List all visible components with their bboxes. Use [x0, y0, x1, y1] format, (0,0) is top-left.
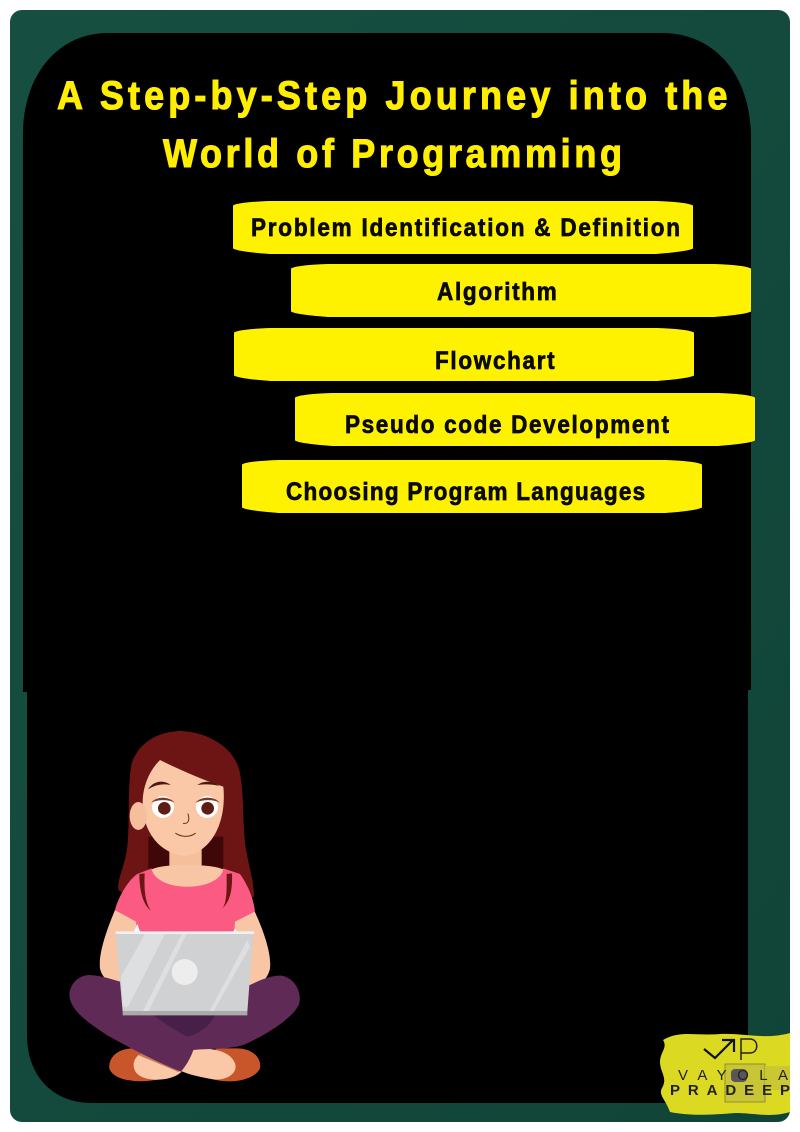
nose and mouth: [176, 814, 195, 836]
legs: [69, 975, 300, 1072]
step 1: Problem Identification & Definition: [234, 202, 692, 253]
logo badge: [660, 1033, 790, 1115]
laptop lid: [116, 933, 253, 1012]
ear: [130, 802, 147, 830]
step 1: Problem Identification & Definition: Problem Identification & Definition: [251, 214, 680, 242]
ankle: [138, 1052, 182, 1072]
title: World of Programming: [163, 132, 622, 176]
laptop logo: [172, 959, 198, 985]
step 4: Pseudo code Development: [296, 394, 754, 445]
illustration: girl with laptop: [69, 731, 300, 1081]
badge dotted strip: [765, 1066, 790, 1090]
badge text: VAYOLA: [678, 1067, 788, 1084]
step 2: Algorithm: [292, 265, 750, 316]
badge icon chip: [731, 1069, 747, 1082]
step 5: Choosing Program Languages: Choosing Program Languages: [286, 478, 645, 506]
title: [57, 74, 727, 176]
badge shape: [660, 1033, 790, 1115]
step 4: Pseudo code Development: Pseudo code Development: [345, 411, 669, 439]
title: A Step-by-Step Journey into the: [57, 74, 727, 118]
step 3: Flowchart: [235, 329, 693, 380]
laptop base: [123, 1011, 247, 1015]
badge text: PRADEEP: [670, 1082, 790, 1099]
neck: [169, 847, 202, 867]
step 5: Choosing Program Languages: [243, 461, 701, 512]
hair shadow behind neck: [148, 837, 223, 870]
step 2: Algorithm: Algorithm: [437, 278, 557, 306]
face: [143, 760, 224, 856]
inner leg shadow: [153, 1015, 215, 1037]
hair strands on shirt: [139, 873, 232, 911]
shirt: [115, 868, 255, 937]
shirt lower strip: [168, 1013, 200, 1019]
badge letter mark: [741, 1039, 757, 1060]
badge dotted square: [725, 1064, 765, 1102]
white sleeve tabs: [134, 924, 237, 932]
laptop top edge: [116, 931, 254, 934]
hair: [118, 731, 254, 910]
badge text: [670, 1067, 790, 1099]
laptop glare: [121, 934, 250, 1012]
badge check arrow mark: [704, 1040, 734, 1058]
eyebrows: [148, 782, 219, 789]
neckline skin: [152, 865, 223, 887]
feet: [134, 1048, 236, 1080]
step 3: Flowchart: Flowchart: [435, 347, 555, 375]
eyes: [151, 796, 220, 818]
shoes: [109, 1048, 260, 1081]
arms: [100, 910, 270, 990]
